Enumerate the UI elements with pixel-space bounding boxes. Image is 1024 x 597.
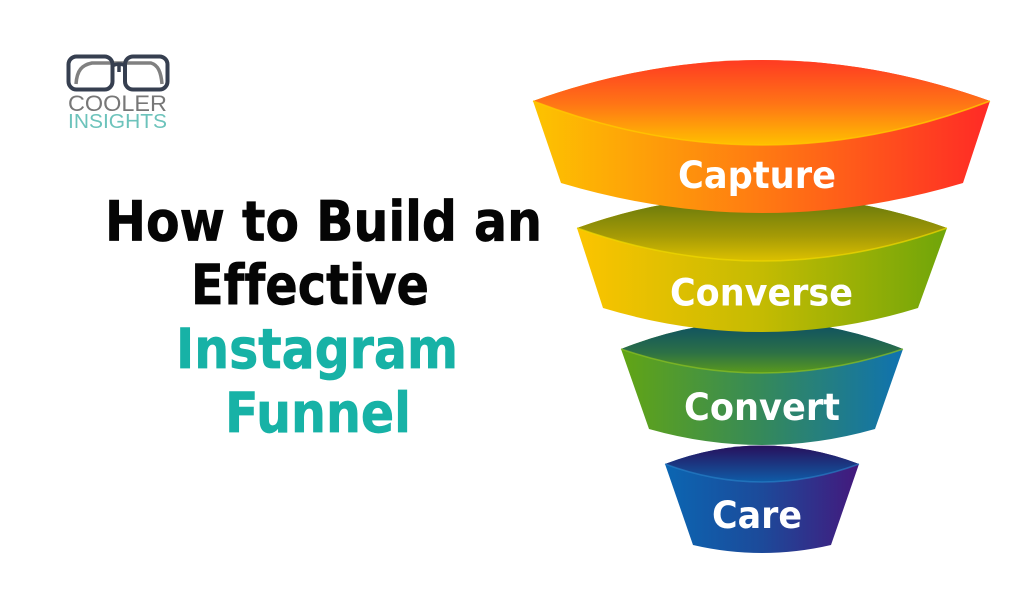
logo wordmark: INSIGHTS: INSIGHTS bbox=[68, 111, 167, 133]
title line: How to Build an: How to Build an bbox=[105, 190, 542, 254]
icon: glasses bbox=[68, 56, 168, 90]
title line: Funnel: Funnel bbox=[225, 381, 411, 445]
funnel tier: Converse bbox=[577, 195, 947, 332]
title line: Instagram: Instagram bbox=[176, 317, 458, 381]
funnel bbox=[533, 60, 990, 553]
funnel tier: Care: Care bbox=[712, 494, 802, 537]
title bbox=[105, 190, 542, 445]
title line: Effective: Effective bbox=[191, 253, 429, 317]
funnel tier: Capture bbox=[533, 60, 990, 213]
funnel tier: Convert bbox=[621, 321, 903, 445]
funnel tier: Capture: Capture bbox=[678, 154, 836, 197]
funnel tier: Care bbox=[665, 446, 859, 553]
funnel tier: Convert: Convert bbox=[684, 386, 840, 429]
logo wordmark: COOLER: COOLER bbox=[68, 91, 167, 116]
funnel tier: Converse: Converse bbox=[670, 272, 853, 314]
logo: Cooler Insights bbox=[68, 56, 168, 133]
